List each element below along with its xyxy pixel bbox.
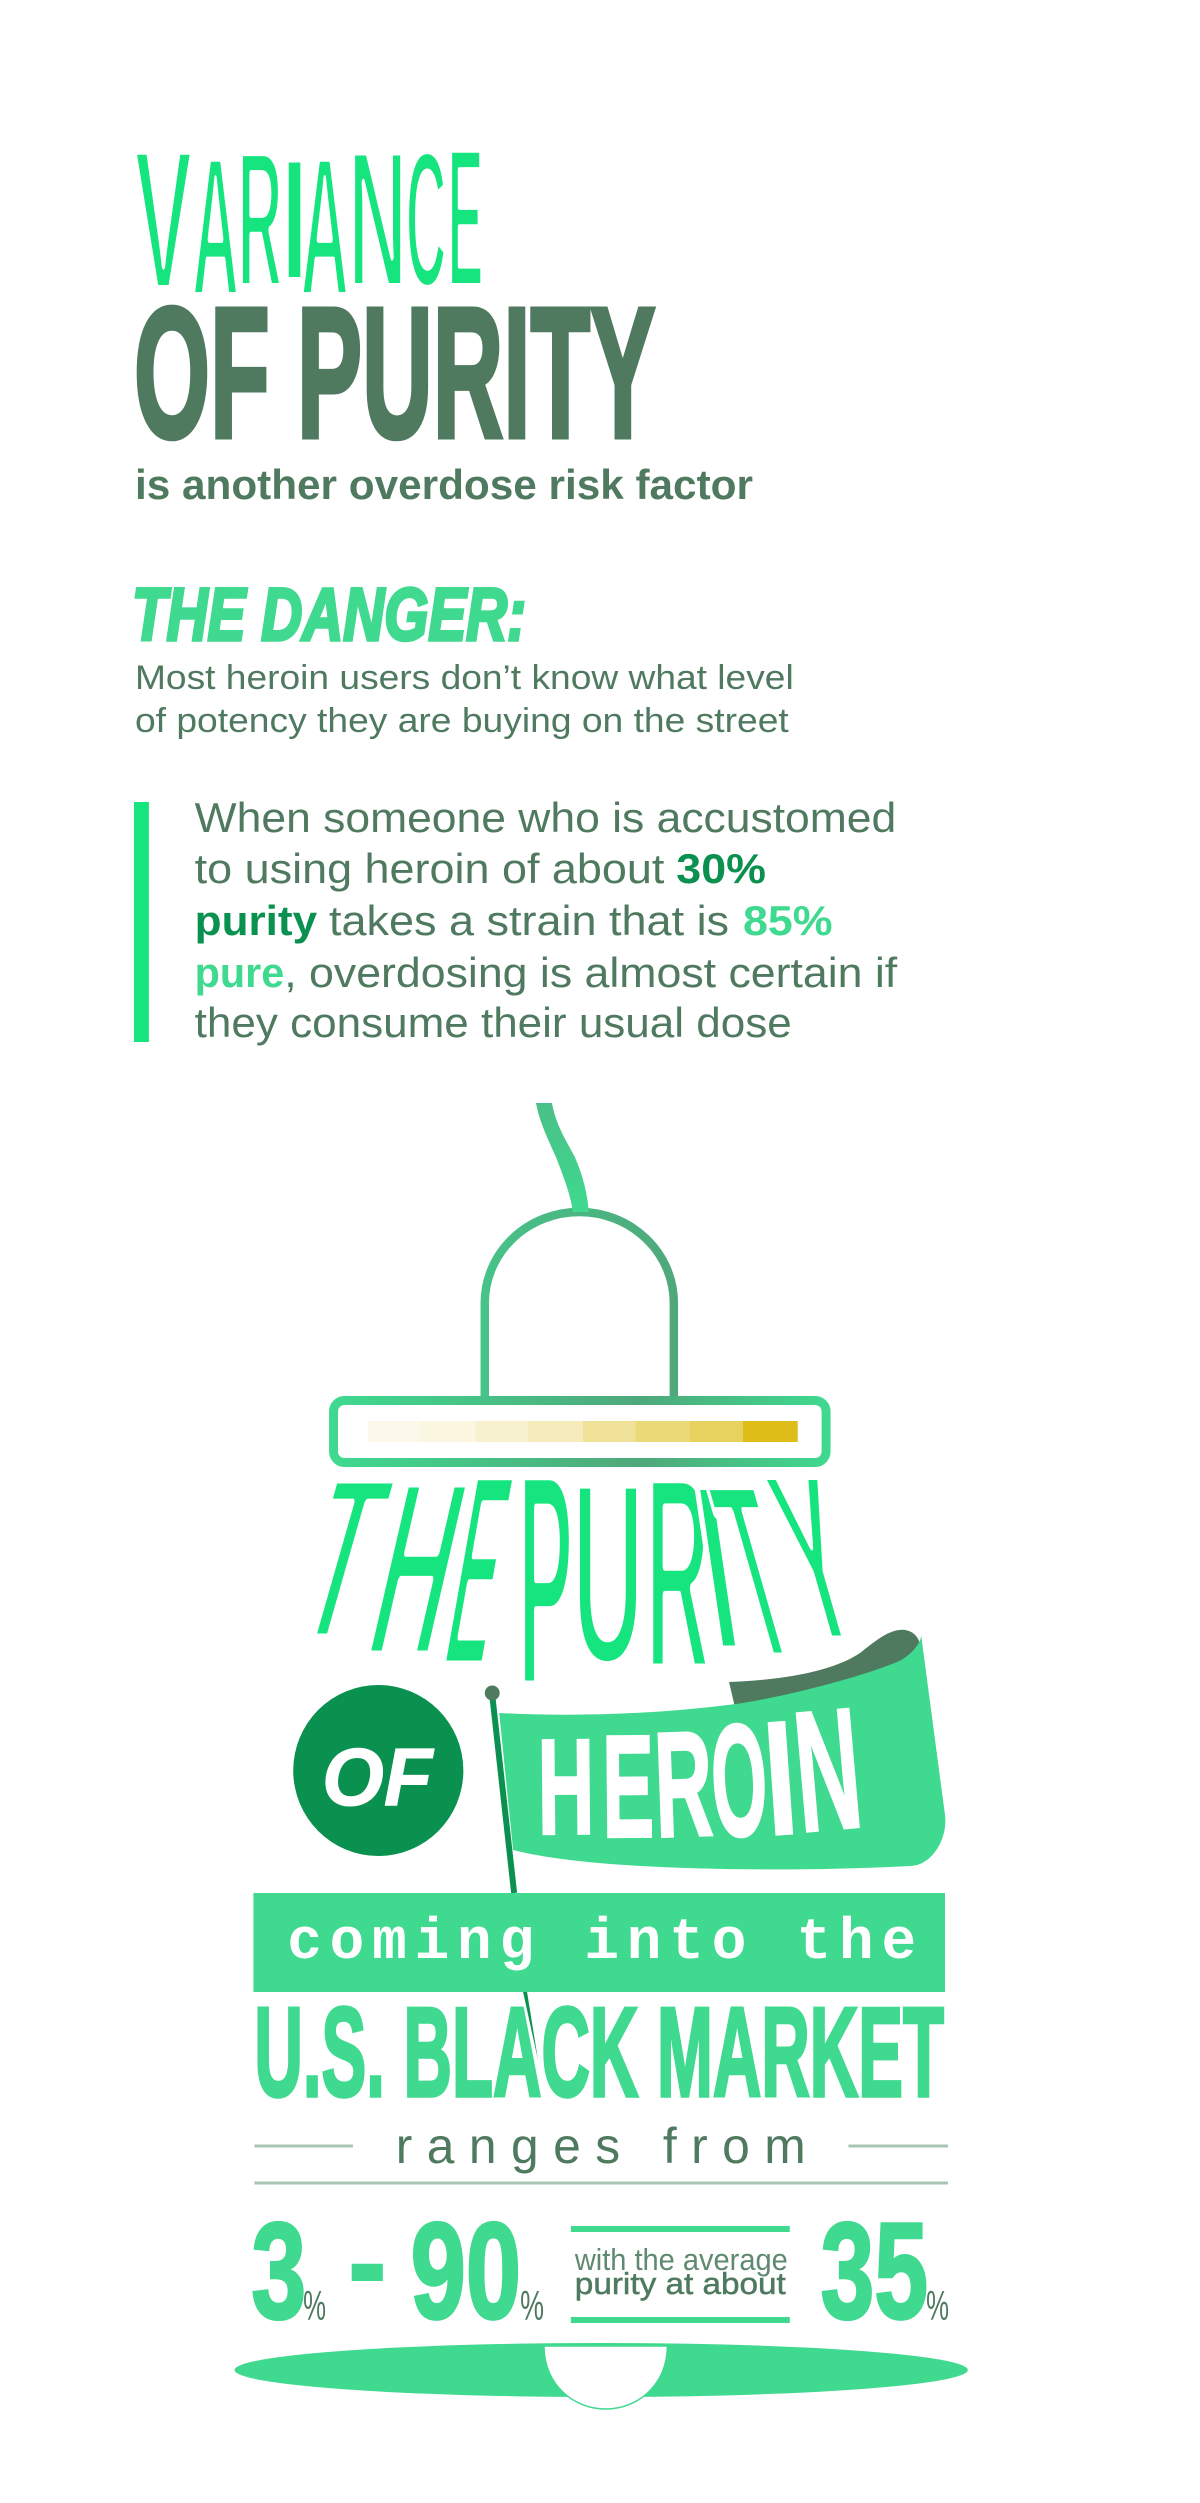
quote text: to using heroin of about bbox=[195, 845, 665, 892]
quote text: they consume their usual dose bbox=[195, 999, 792, 1046]
average label bbox=[571, 2226, 790, 2323]
quote text: takes a strain that is bbox=[329, 897, 729, 944]
stats: purity range and average bbox=[251, 2179, 949, 2347]
title: variance of purity bbox=[134, 107, 753, 508]
stat: 3 percent: 3 bbox=[251, 2194, 306, 2347]
quote text: pure bbox=[195, 949, 284, 996]
heading: the purity: H bbox=[349, 1427, 488, 1710]
flag fold bbox=[729, 1630, 921, 1712]
quote text: 85% bbox=[743, 897, 833, 944]
illustration: base ellipse with bowl bbox=[234, 2343, 968, 2409]
subheading: ranges from: ranges from bbox=[396, 2118, 806, 2174]
stat: 3 percent: % bbox=[303, 2282, 326, 2329]
flag text: I bbox=[759, 1688, 802, 1870]
banner: coming into the: coming into the bbox=[287, 1911, 916, 1976]
text: danger description: Most heroin users don’t know what level bbox=[135, 659, 794, 697]
flag banner bbox=[499, 1635, 945, 1869]
quote text: , overdosing is almost certain if bbox=[284, 949, 898, 996]
heading: variance: A bbox=[300, 114, 349, 339]
icon: string bbox=[536, 1103, 589, 1212]
subtitle: is another overdose risk factor bbox=[135, 461, 753, 508]
quote text: purity bbox=[195, 897, 318, 944]
flag text: N bbox=[787, 1673, 868, 1869]
purity colour scale bbox=[368, 1421, 798, 1442]
flag text bbox=[537, 1673, 868, 1871]
range dash: - bbox=[347, 2179, 388, 2341]
section: the danger bbox=[132, 573, 794, 740]
average label: purity at about bbox=[575, 2266, 786, 2301]
icon: dome bbox=[485, 1212, 674, 1396]
heading: the purity bbox=[275, 1409, 883, 1752]
heading: the purity: P bbox=[518, 1409, 573, 1752]
flag: heroin bbox=[485, 1630, 945, 1893]
heading: of purity: OF PURITY bbox=[134, 270, 655, 477]
heading: the purity: T bbox=[690, 1432, 820, 1713]
callout: overdose quote bbox=[134, 794, 898, 1046]
heading: variance bbox=[134, 107, 483, 339]
flag text: E bbox=[602, 1704, 655, 1868]
accent bar bbox=[134, 802, 149, 1042]
heading: variance: C bbox=[406, 109, 447, 329]
stat: 35 percent: % bbox=[926, 2282, 949, 2329]
heading: the purity: R bbox=[645, 1417, 710, 1728]
badge: of: OF bbox=[322, 1732, 435, 1823]
heading: variance: I bbox=[278, 120, 311, 319]
heading: variance: A bbox=[192, 115, 239, 339]
quote text bbox=[195, 794, 898, 1046]
stat: 35 percent: 35 bbox=[821, 2194, 928, 2347]
flag text: O bbox=[707, 1690, 772, 1871]
average label: with the average bbox=[574, 2242, 788, 2277]
flag text: H bbox=[537, 1710, 595, 1863]
illustration: bottle cap with purity scale bbox=[334, 1103, 826, 1462]
heading: the danger: THE DANGER: bbox=[132, 573, 526, 656]
flag pole knob bbox=[485, 1686, 500, 1700]
heading: the purity: T bbox=[275, 1427, 412, 1689]
heading: variance: N bbox=[348, 108, 407, 329]
heading: variance: V bbox=[134, 108, 193, 332]
flag text: R bbox=[652, 1700, 715, 1869]
stat: 90 percent: 90 bbox=[411, 2194, 521, 2347]
banner: coming into the bbox=[253, 1893, 945, 1992]
stat: 90 percent: % bbox=[520, 2282, 544, 2329]
quote text: 30% bbox=[676, 845, 766, 892]
heading: the purity: Y bbox=[746, 1424, 883, 1693]
flag pole tail bbox=[523, 1992, 538, 2060]
heading: the purity: I bbox=[681, 1431, 754, 1702]
heading: variance: R bbox=[237, 109, 283, 329]
heading: the purity: E bbox=[429, 1415, 529, 1726]
heading: variance: E bbox=[447, 107, 483, 331]
heading: the purity: U bbox=[572, 1427, 644, 1721]
text: danger description bbox=[135, 659, 794, 740]
flag pole bbox=[492, 1695, 514, 1893]
badge: of bbox=[293, 1685, 463, 1856]
purity scale frame bbox=[334, 1400, 826, 1462]
text: danger description: of potency they are buying on the street bbox=[135, 702, 789, 740]
quote text: When someone who is accustomed bbox=[195, 794, 896, 841]
